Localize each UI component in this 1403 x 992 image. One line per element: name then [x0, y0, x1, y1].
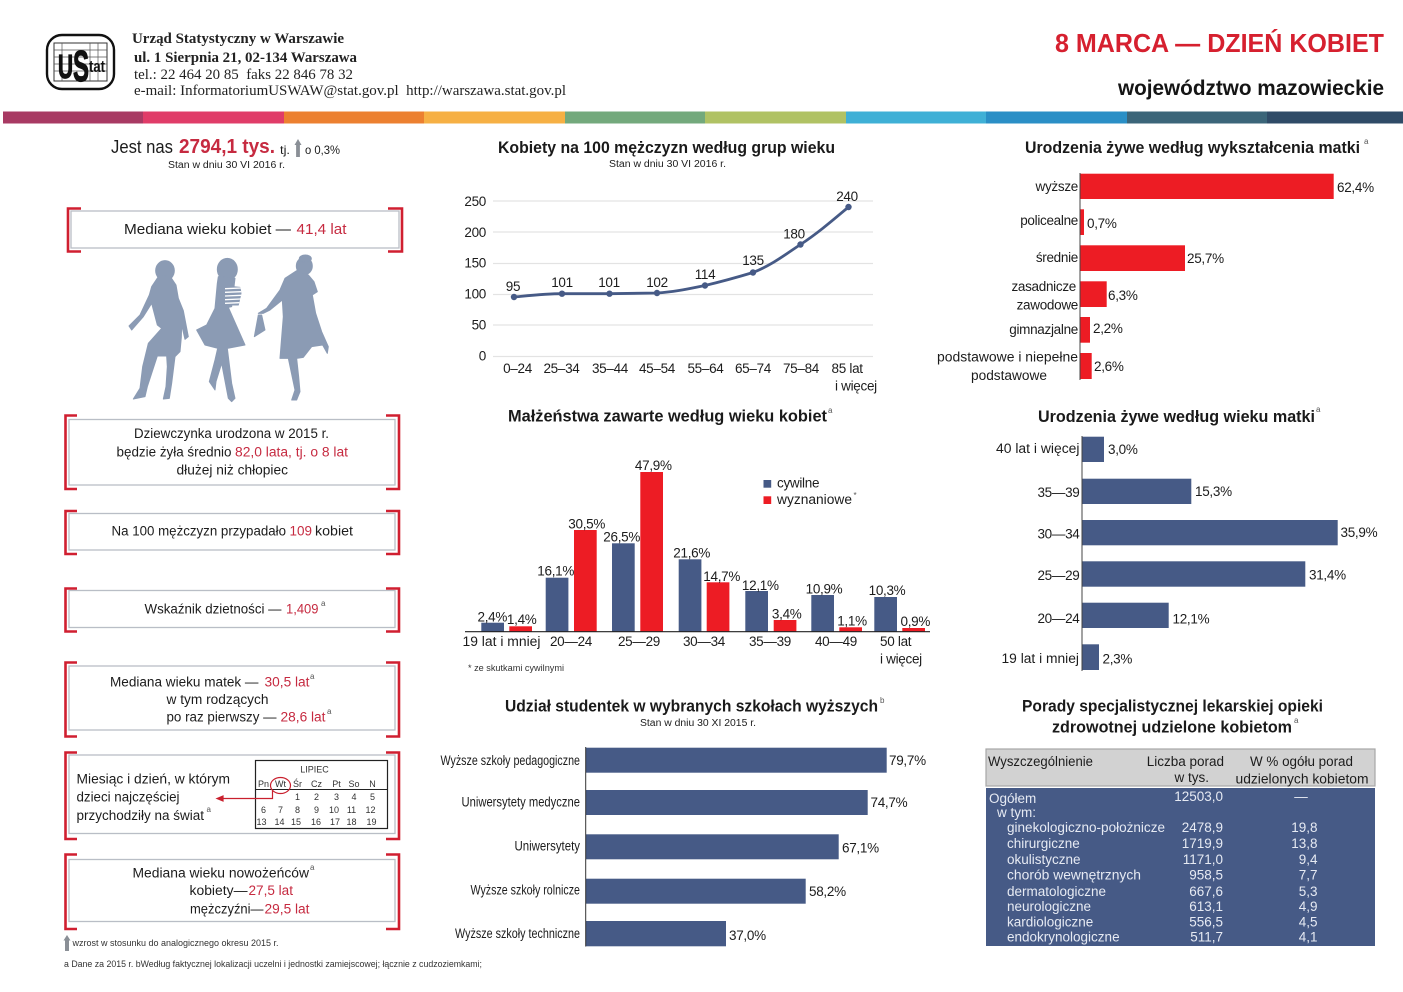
title: 8 MARCA — DZIEŃ KOBIET [1055, 28, 1384, 58]
calendar: July: 1 [295, 792, 300, 802]
chart: marriages by bride age (grouped bars): 21,6% [673, 546, 710, 560]
panel: median age of women: 41,4 lat [296, 222, 346, 238]
chart: women per 100 men by age (line): 102 [646, 275, 668, 290]
chart: female students by school type (bars): 37,0% [729, 928, 766, 943]
calendar: July: 7 [278, 805, 283, 815]
panel: most common birth date: przychodziły na świat [76, 808, 204, 823]
calendar: July: 18 [346, 817, 357, 827]
table header: Liczba porad [1147, 754, 1224, 769]
header: office address: e-mail: InformatoriumUSWAW@stat.gov.pl http://warszawa.stat.gov.pl [134, 83, 566, 99]
chart: women per 100 men by age (line): 75–84 [783, 361, 820, 376]
chart: marriages by bride age (grouped bars): 16,1% [537, 564, 574, 578]
panel: women per 100 men: 109 [290, 524, 312, 538]
panel: most common birth date [66, 752, 399, 839]
legend: growth arrow note [64, 935, 278, 951]
panel: women per 100 men: kobiet [315, 524, 353, 538]
calendar: July: 12 [365, 805, 376, 815]
calendar: July [256, 760, 388, 828]
chart: births by mother's age (bars): 3,0% [1108, 442, 1138, 457]
chart: births by mother's age (bars): 40 lat i więcej [996, 441, 1080, 456]
chart: women per 100 men by age (line): 0 [479, 348, 486, 364]
chart: births by mother's education (bars) [937, 137, 1374, 383]
panel: women per 100 men [66, 511, 399, 554]
table body: 1171,0 [1183, 852, 1223, 867]
table body: w tym: [996, 805, 1036, 820]
chart: births by mother's age (bars): 19 lat i mniej [1002, 651, 1079, 666]
panel: most common birth date: dzieci najczęściej [76, 790, 180, 804]
table body: chirurgiczne [1007, 836, 1080, 851]
table body: 5,3 [1299, 884, 1318, 899]
chart: births by mother's age (bars): 20—24 [1037, 611, 1080, 626]
chart: women per 100 men by age (line): i więcej [835, 378, 877, 394]
calendar: July: 3 [334, 792, 339, 802]
panel: fertility rate [66, 588, 399, 632]
table body: 2478,9 [1182, 820, 1223, 835]
chart: women per 100 men by age (line): 45–54 [639, 361, 676, 376]
table body: 958,5 [1189, 868, 1223, 882]
chart: female students by school type (bars): Uniwersytety medyczne [462, 794, 580, 810]
chart: births by mother's education (bars): średnie [1036, 250, 1078, 265]
panel: median age of mothers: a [327, 707, 332, 716]
panel: median age of mothers: 30,5 lat [264, 674, 310, 690]
panel: median age of newlyweds: mężczyźni— [190, 902, 264, 916]
legend: cywilne [777, 476, 819, 490]
calendar: July: 16 [311, 817, 321, 827]
chart: births by mother's age (bars): Urodzenia żywe według wieku matki [1038, 408, 1315, 426]
chart: women per 100 men by age (line): 200 [464, 225, 486, 240]
chart: births by mother's age (bars): 25—29 [1037, 568, 1080, 583]
icon: three women silhouettes [129, 255, 328, 402]
chart: marriages by bride age (grouped bars): 25—29 [618, 634, 660, 649]
panel: median age of newlyweds: Mediana wieku nowożeńców [132, 866, 309, 880]
table body: 556,5 [1189, 914, 1223, 930]
chart: births by mother's age (bars): 12,1% [1172, 612, 1210, 626]
panel: median age of mothers: a [310, 672, 315, 681]
chart: female students by school type (bars): Wyższe szkoły rolnicze [470, 882, 580, 898]
panel: median age of mothers [66, 662, 399, 736]
chart: births by mother's education (bars): 2,2% [1093, 321, 1123, 336]
calendar: July: 14 [274, 817, 285, 827]
chart: women per 100 men by age (line): 101 [598, 275, 620, 290]
chart: births by mother's age (bars): 35,9% [1340, 525, 1378, 540]
chart: female students by school type (bars): Udział studentek w wybranych szkołach wyższych [505, 698, 878, 716]
chart: women per 100 men by age (line): 135 [742, 253, 764, 268]
chart: marriages by bride age (grouped bars) [462, 406, 930, 673]
panel: fertility rate: 1,409 [286, 602, 318, 616]
chart: female students by school type (bars): Wyższe szkoły pedagogiczne [440, 753, 580, 768]
legend: * [854, 491, 856, 500]
panel: median age of women: Mediana wieku kobiet — [124, 222, 292, 238]
chart: births by mother's education (bars): policealne [1020, 213, 1078, 228]
panel: fertility rate: a [321, 599, 326, 608]
chart: marriages by bride age (grouped bars): 47,9% [635, 458, 672, 473]
chart: women per 100 men by age (line): 180 [783, 226, 805, 242]
chart: births by mother's education (bars): zawodowe [1017, 298, 1078, 312]
chart: marriages by bride age (grouped bars): * ze skutkami cywilnymi [468, 663, 564, 673]
table: specialist consultations [986, 698, 1375, 946]
header: office address: Urząd Statystyczny w Warszawie [132, 31, 345, 47]
table body: endokrynologiczne [1007, 930, 1120, 944]
panel: median age of mothers: Mediana wieku matek — [110, 674, 259, 690]
chart: women per 100 men by age (line): 114 [695, 267, 716, 282]
chart: marriages by bride age (grouped bars): 40—49 [815, 634, 857, 649]
table body: 19,8 [1291, 820, 1318, 835]
chart: marriages by bride age (grouped bars): 35—39 [749, 634, 791, 649]
table body: 667,6 [1189, 884, 1223, 899]
arrow: highlighted weekday [217, 778, 290, 801]
calendar: July: 13 [256, 817, 267, 827]
panel: median age of women [68, 208, 402, 252]
colour band [3, 112, 1403, 124]
chart: female students by school type (bars): Stan w dniu 30 XI 2015 r. [640, 718, 756, 729]
chart: women per 100 men by age (line): 101 [551, 275, 573, 290]
chart: female students by school type (bars): Wyższe szkoły techniczne [455, 926, 580, 941]
table body: 4,5 [1299, 914, 1318, 930]
legend: wyznaniowe [776, 492, 852, 507]
table header: Wyszczególnienie [988, 754, 1093, 769]
table body: 1719,9 [1182, 836, 1223, 851]
chart: female students by school type (bars): b [880, 696, 885, 705]
table body: ginekologiczno-położnicze [1007, 820, 1165, 835]
chart: marriages by bride age (grouped bars): 50 lat [880, 634, 912, 649]
table body: 511,7 [1190, 930, 1223, 944]
chart: births by mother's education (bars): wyższe [1035, 179, 1078, 194]
chart: women per 100 men by age (line): 55–64 [687, 361, 724, 376]
table: specialist consultations: Porady specjalistycznej lekarskiej opieki [1022, 698, 1323, 716]
table body: okulistyczne [1007, 852, 1081, 867]
chart: births by mother's education (bars): zasadnicze [1011, 279, 1076, 294]
chart: marriages by bride age (grouped bars): 3,4% [772, 606, 802, 622]
chart: births by mother's age (bars): a [1316, 405, 1321, 414]
headline: population: Jest nas [111, 137, 173, 157]
calendar: July: 2 [314, 792, 319, 802]
icon: up arrow [294, 139, 302, 157]
table body: — [1294, 789, 1308, 804]
chart: female students by school type (bars): 79,7% [889, 753, 926, 768]
panel: median age of mothers: w tym rodzących [165, 692, 268, 707]
chart: marriages by bride age (grouped bars): 1,1% [837, 614, 867, 628]
calendar: July: 6 [261, 805, 266, 815]
table body: 9,4 [1299, 852, 1318, 867]
header: office address: ul. 1 Sierpnia 21, 02-134 Warszawa [134, 50, 358, 66]
chart: births by mother's age (bars): 30—34 [1037, 526, 1080, 542]
calendar: July: 17 [330, 817, 340, 827]
chart: marriages by bride age (grouped bars): 12,1% [742, 578, 779, 593]
chart: women per 100 men by age (line): 50 [472, 318, 486, 332]
chart: marriages by bride age (grouped bars): 10,3% [869, 583, 906, 598]
chart: marriages by bride age (grouped bars): Małżeństwa zawarte według wieku kobiet [508, 408, 827, 426]
icon: US Stat logo: tat [89, 57, 105, 76]
chart: marriages by bride age (grouped bars): 10,9% [806, 582, 843, 596]
chart: women per 100 men by age (line): 150 [464, 256, 486, 270]
icon: US Stat logo: U [58, 48, 73, 85]
calendar: July: Cz [311, 779, 322, 789]
chart: births by mother's age (bars): 35—39 [1037, 485, 1080, 500]
table body: dermatologiczne [1007, 884, 1106, 899]
calendar: July: N [369, 779, 376, 789]
chart: women per 100 men by age (line): 100 [464, 286, 486, 302]
chart: women per 100 men by age (line): 240 [836, 189, 858, 204]
panel: life expectancy: Dziewczynka urodzona w 2015 r. [134, 426, 329, 441]
table body: 613,1 [1189, 899, 1223, 914]
table body: 7,7 [1299, 868, 1318, 882]
chart: births by mother's education (bars): 0,7% [1087, 216, 1117, 231]
panel: women per 100 men: Na 100 mężczyzn przypadało [112, 524, 286, 538]
chart: women per 100 men by age (line): 95 [506, 279, 520, 294]
chart: marriages by bride age (grouped bars): 30,5% [568, 516, 605, 532]
legend: growth arrow note: wzrost w stosunku do analogicznego okresu 2015 r. [72, 938, 278, 949]
chart: births by mother's education (bars): 25,7% [1187, 251, 1224, 266]
panel: median age of mothers: po raz pierwszy — [166, 710, 277, 724]
chart: births by mother's education (bars): 2,6% [1094, 359, 1124, 374]
panel: most common birth date: a [206, 805, 212, 814]
panel: median age of newlyweds [66, 854, 399, 929]
chart: female students by school type (bars): 67,1% [842, 840, 879, 856]
table body: Ogółem [989, 791, 1036, 806]
panel: median age of newlyweds: a [310, 863, 315, 872]
chart: births by mother's age (bars): 15,3% [1195, 484, 1232, 499]
chart: marriages by bride age (grouped bars): 19 lat i mniej [462, 634, 540, 649]
chart: women per 100 men by age (line): 0–24 [503, 361, 533, 376]
headline: population: 2794,1 tys. [179, 136, 275, 158]
panel: median age of newlyweds: kobiety— [190, 883, 248, 898]
header: office address: tel.: 22 464 20 85 faks 22 846 78 32 [134, 67, 353, 83]
panel: life expectancy: będzie żyła średnio [116, 444, 232, 460]
panel: most common birth date: Miesiąc i dzień, w którym [76, 772, 230, 786]
calendar: July: 9 [314, 805, 319, 815]
calendar: July: 15 [291, 817, 301, 827]
calendar: July: 10 [329, 805, 339, 815]
chart: female students by school type (bars): 74,7% [870, 795, 908, 810]
table body: neurologiczne [1007, 899, 1091, 914]
chart: marriages by bride age (grouped bars): 1,4% [507, 612, 537, 627]
chart: marriages by bride age (grouped bars): 26,5% [603, 530, 640, 544]
chart: women per 100 men by age (line): Stan w dniu 30 VI 2016 r. [609, 159, 726, 170]
table body: 13,8 [1291, 836, 1318, 851]
table header: W % ogółu porad [1250, 754, 1353, 769]
chart: women per 100 men by age (line): 65–74 [735, 361, 772, 376]
legend [764, 476, 856, 507]
calendar: July: Śr [293, 778, 302, 789]
calendar: July: 4 [351, 792, 357, 802]
headline: population: tj. [280, 143, 290, 157]
chart: marriages by bride age (grouped bars): 20—24 [550, 634, 593, 649]
calendar: July: LIPIEC [300, 764, 329, 774]
icon: US Stat logo: S [73, 42, 89, 91]
calendar: July: So [348, 779, 360, 789]
table body [986, 788, 1375, 946]
panel: median age of mothers: 28,6 lat [280, 710, 326, 724]
chart: births by mother's education (bars): podstawowe i niepełne [937, 350, 1078, 364]
chart: births by mother's education (bars): Urodzenia żywe według wykształcenia matki [1025, 139, 1360, 157]
panel: median age of newlyweds: 29,5 lat [264, 902, 310, 916]
chart: births by mother's age (bars): 31,4% [1309, 568, 1346, 582]
calendar: July: 5 [370, 792, 375, 802]
chart: marriages by bride age (grouped bars): a [828, 406, 833, 415]
calendar: July: Pt [332, 779, 341, 789]
chart: births by mother's age (bars): 2,3% [1102, 652, 1132, 666]
chart: births by mother's age (bars) [996, 405, 1378, 671]
table header: udzielonych kobietom [1236, 772, 1368, 786]
panel: median age of newlyweds: 27,5 lat [248, 883, 293, 898]
chart: marriages by bride age (grouped bars): 14,7% [703, 569, 740, 584]
chart: births by mother's education (bars): gimnazjalne [1009, 322, 1078, 337]
chart: births by mother's education (bars): a [1364, 137, 1369, 146]
panel: life expectancy [66, 416, 399, 489]
subtitle: region: województwo mazowieckie [1117, 77, 1384, 100]
calendar: July: 8 [295, 805, 300, 815]
header: office address [132, 31, 566, 99]
chart: marriages by bride age (grouped bars): 0,9% [901, 614, 930, 629]
table body: 12503,0 [1174, 789, 1223, 804]
table body: 4,9 [1299, 899, 1318, 914]
chart: female students by school type (bars) [440, 696, 926, 946]
chart: female students by school type (bars): 58,2% [809, 884, 846, 899]
headline: population [111, 136, 340, 171]
footnotes: a Dane za 2015 r. bWedług faktycznej lokalizacji uczelni i jednostki zamiejscowej; łącznie z cudzoziemkami; [64, 959, 482, 969]
calendar: July: 19 [366, 817, 377, 827]
chart: women per 100 men by age (line): 25–34 [543, 361, 580, 376]
table header [986, 749, 1375, 786]
table header: w tys. [1173, 770, 1209, 785]
panel: life expectancy: dłużej niż chłopiec [176, 462, 288, 478]
chart: female students by school type (bars): Uniwersytety [514, 838, 580, 854]
panel: life expectancy: 82,0 lata, tj. o 8 lat [235, 444, 348, 460]
chart: marriages by bride age (grouped bars): 2,4% [478, 610, 507, 624]
table body: kardiologiczne [1007, 914, 1093, 930]
headline: population: Stan w dniu 30 VI 2016 r. [168, 160, 285, 171]
calendar: July: 11 [347, 805, 356, 815]
chart: marriages by bride age (grouped bars): 30—34 [683, 634, 726, 649]
icon: US Stat logo [47, 35, 114, 91]
chart: marriages by bride age (grouped bars): i więcej [880, 652, 922, 666]
panel: fertility rate: Wskaźnik dzietności — [144, 602, 282, 616]
chart: women per 100 men by age (line): 85 lat [832, 361, 863, 376]
calendar: July: Wt [275, 779, 286, 789]
chart: births by mother's education (bars): podstawowe [971, 368, 1047, 383]
chart: births by mother's education (bars): 6,3% [1108, 288, 1138, 303]
chart: women per 100 men by age (line): 250 [464, 194, 486, 209]
calendar: July: Pn [258, 779, 269, 789]
table: specialist consultations: a [1294, 716, 1299, 725]
chart: women per 100 men by age (line): 35–44 [592, 361, 629, 376]
table body: chorób wewnętrznych [1007, 868, 1141, 882]
chart: births by mother's education (bars): 62,4% [1337, 180, 1374, 195]
table: specialist consultations: zdrowotnej udzielone kobietom [1052, 718, 1292, 736]
chart: women per 100 men by age (line): Kobiety na 100 mężczyzn według grup wieku [498, 139, 835, 157]
chart: women per 100 men by age (line) [464, 139, 877, 394]
headline: population: o 0,3% [305, 143, 340, 157]
table body: 4,1 [1299, 930, 1318, 944]
